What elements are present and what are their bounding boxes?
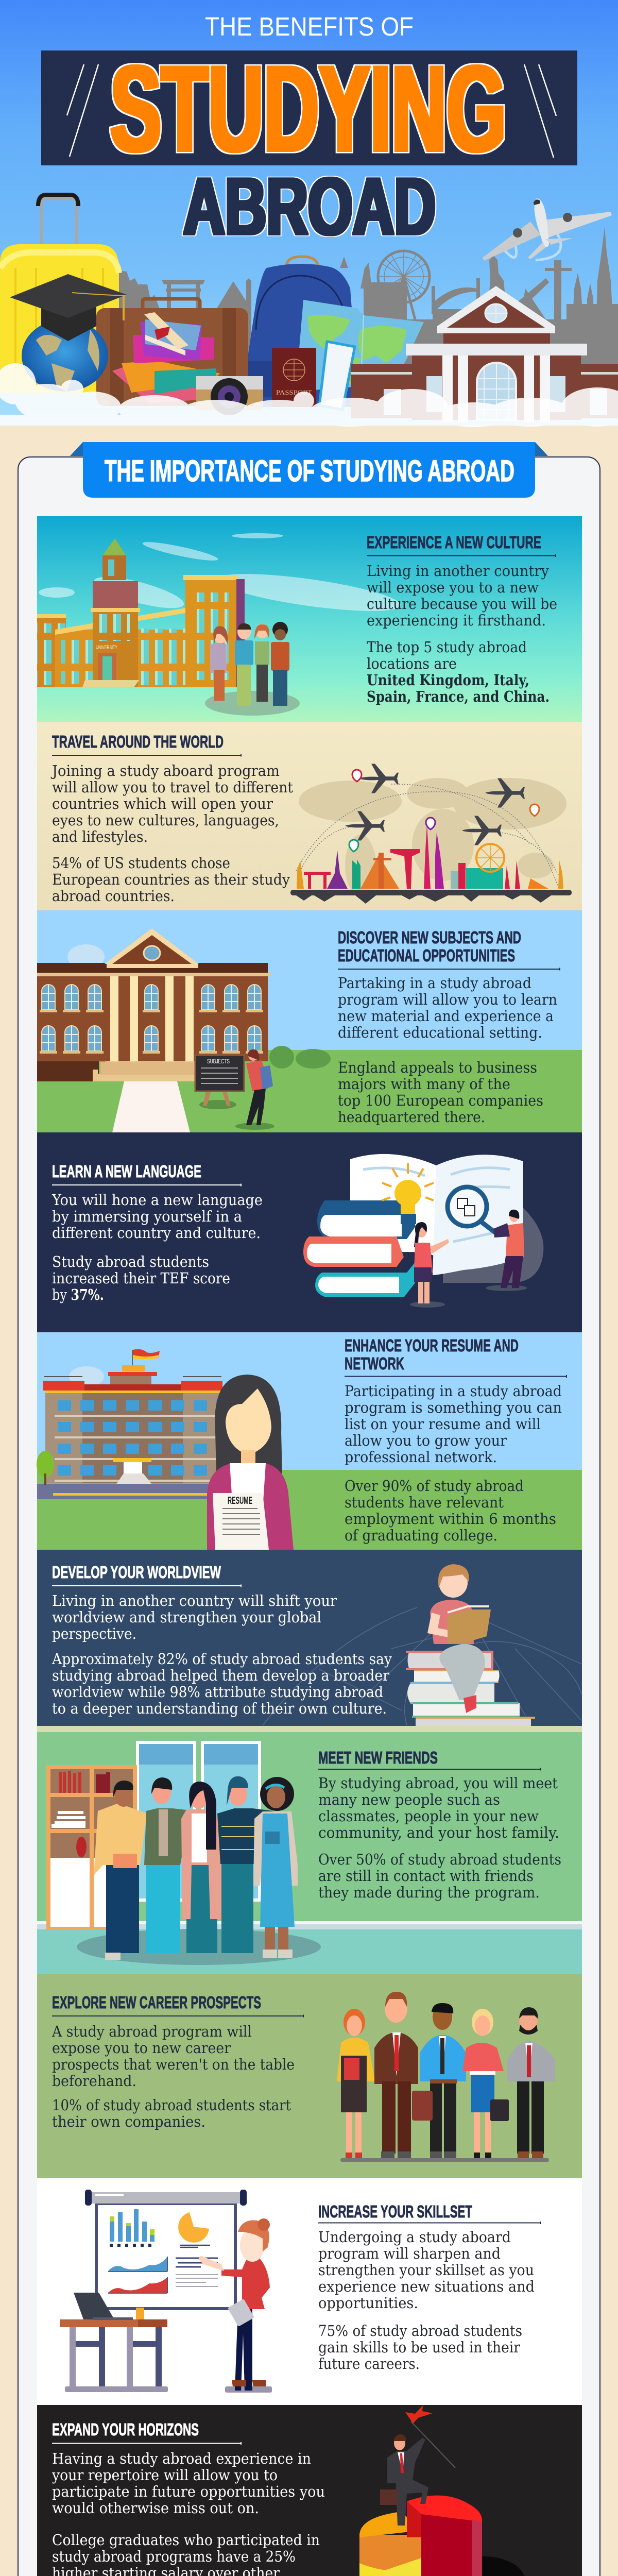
panel: increase your skillset [37,2178,582,2405]
icon: globe with graduation cap [10,274,127,392]
text block: program is something you can [345,1399,562,1416]
icon: backpack [244,257,355,407]
icon: airplane [483,198,612,261]
text block [52,2450,325,2576]
text block: to a deeper understanding of their own culture. [52,1700,387,1717]
text block: top 100 European companies [338,1092,543,1109]
text block: will expose you to a new [367,579,539,596]
text block: countries which will open your [52,795,273,812]
icon: camera [196,376,263,415]
text block: program will allow you to learn [338,991,557,1008]
text block [318,1774,561,1901]
text block: new material and experience a [338,1007,554,1025]
text block [52,2023,295,2130]
text block: gain skills to be used in their [318,2338,520,2356]
text block: and lifestyles. [52,828,148,845]
text block: increased their TEF score [52,1269,230,1287]
panel: discover new subjects [37,910,582,1132]
text block: United Kingdom, Italy, [367,671,529,689]
text block: different educational setting. [338,1024,542,1041]
text block: You will hone a new language [52,1191,263,1209]
illustration: world map landmarks [290,764,572,904]
icon: boarding pass [319,342,355,410]
illustration: globe network and student on books [263,1564,582,1726]
text block: Undergoing a study aboard [318,2228,511,2246]
panel: travel around the world [37,722,582,910]
professional 2 [374,1992,418,2158]
text block: Living in another country will shift your [52,1592,337,1609]
text block: different country and culture. [52,1224,261,1242]
text block: Joining a study aboard program [50,762,280,779]
text block: opportunities. [318,2294,418,2312]
heading: TRAVEL AROUND THE WORLD [52,732,224,751]
heading: EXPERIENCE A NEW CULTURE [367,533,541,552]
text block: Over 90% of study abroad [345,1477,524,1495]
title: the benefits of: THE BENEFITS OF [205,12,414,41]
text block: beforehand. [52,2072,136,2090]
heading: EXPAND YOUR HORIZONS [52,2420,199,2439]
text block: culture because you will be [367,595,557,613]
text block: community, and your host family. [318,1824,559,1841]
heading: DEVELOP YOUR WORLDVIEW [52,1563,221,1582]
text block: Living in another country [367,562,550,580]
heading: ENHANCE YOUR RESUME AND [345,1336,519,1355]
text block: they made during the program. [318,1884,540,1901]
friend 4 [217,1776,273,1953]
text block: worldview while 98% attribute studying abroad [52,1683,383,1701]
panel: meet new friends [37,1726,582,1974]
text block [52,1592,392,1717]
friend 3 [181,1782,222,1953]
friend 1 [94,1781,147,1960]
heading [338,928,521,965]
text block: by 37%. [52,1286,104,1303]
text block: England appeals to business [338,1059,537,1076]
text block [50,762,293,905]
header: sky hero [0,0,618,427]
text block: Having a study abroad experience in [52,2450,311,2467]
text block: Approximately 82% of study abroad students say [52,1650,392,1668]
text block [367,562,557,705]
text block: many new people such as [318,1791,500,1808]
panel: enhance your resume [37,1332,582,1550]
text block: 54% of US students chose [52,854,230,872]
text block [338,974,557,1126]
text block: European countries as their study [52,871,290,888]
text block [345,1382,562,1544]
text block: future careers. [318,2355,420,2372]
illustration: five professionals [337,1992,555,2162]
icon: brown suitcase [96,299,248,406]
text block: expose you to new career [52,2039,231,2057]
section banner [70,442,548,498]
illustration: college building with student: SUBJECTS [207,1058,230,1065]
text block: Partaking in a study abroad [338,974,531,992]
illustration: college building with student [37,928,331,1132]
professional 3 [412,2003,466,2158]
heading: INCREASE YOUR SKILLSET [318,2202,472,2221]
text block: headquartered there. [338,1108,485,1126]
heading: DISCOVER NEW SUBJECTS AND [338,928,521,947]
icon: passport: PASSPORT [276,388,312,396]
icon: yellow suitcase [0,195,119,393]
text block: participate in future opportunities you [52,2483,325,2500]
text block: their own companies. [52,2113,205,2130]
text block: The top 5 study abroad [367,638,527,656]
text block: your repertoire will allow you to [52,2466,278,2484]
text block: list on your resume and will [345,1415,541,1433]
text block: will allow you to travel to different [52,778,293,796]
text block [52,1191,263,1303]
skyline silhouette [119,227,618,371]
text block: eyes to new cultures, languages, [52,811,279,829]
text block: allow you to grow your [345,1432,507,1449]
text block: locations are [367,655,457,672]
text block: study abroad programs have a 25% [52,2548,296,2565]
illustration: building and woman with resume [37,1349,294,1550]
text block: studying abroad helped them develop a broader [52,1667,389,1684]
text block [318,2228,535,2372]
text block: program will sharpen and [318,2245,501,2262]
illustration: university and students: UNIVERSITY [96,645,117,651]
text block: By studying abroad, you will meet [318,1774,558,1792]
clouds [0,363,618,427]
ferris wheel silhouette [378,251,430,319]
text block: prospects that weren't on the table [52,2056,295,2073]
text block: Study abroad students [52,1253,209,1270]
text block: Spain, France, and China. [367,688,550,705]
text block: perspective. [52,1625,136,1642]
friend 5 [253,1777,298,1958]
heading: NETWORK [345,1354,404,1373]
panel: learn a new language [37,1132,582,1332]
professional 5 [507,2007,555,2158]
text block: classmates, people in your new [318,1807,539,1825]
illustration: presenter and chart board [60,2190,272,2393]
heading: LEARN A NEW LANGUAGE [52,1162,201,1181]
icon: university building [351,286,618,422]
text block: strengthen your skillset as you [318,2261,534,2279]
illustration: university and students [37,538,245,687]
icon: stack of books [112,312,220,403]
arch silhouette [364,282,397,319]
panel: experience a new culture [37,516,582,722]
title: abroad: ABROAD [183,161,436,252]
text block: employment within 6 months [345,1510,556,1528]
text block: would otherwise miss out on. [52,2499,259,2517]
friend 2 [144,1777,191,1953]
panel: importance of studying abroad [18,442,600,2576]
text block: 75% of study abroad students [318,2322,522,2340]
text block: College graduates who participated in [52,2531,320,2549]
text block: by immersing yourself in a [52,1208,242,1225]
heading: EXPLORE NEW CAREER PROSPECTS [52,1993,261,2012]
illustration: open book and students [303,1154,543,1308]
text block: professional network. [345,1448,497,1466]
icon: passport [272,348,316,407]
text block: A study abroad program will [52,2023,252,2040]
icon: world map [296,300,424,392]
heading: EDUCATIONAL OPPORTUNITIES [338,946,515,965]
heading [345,1336,519,1373]
text block: abroad countries. [52,887,175,905]
illustration: building and woman with resume: RESUME [228,1495,252,1506]
illustration: group of friends in a room [46,1741,321,1965]
heading: MEET NEW FRIENDS [318,1748,438,1767]
text block: experiencing it firsthand. [367,612,546,629]
professional 4 [462,2009,509,2158]
text block: 10% of study abroad students start [52,2096,291,2114]
text block: students have relevant [345,1494,504,1511]
illustration: man with flag on pie chart [359,2405,525,2576]
text block: majors with many of the [338,1075,510,1093]
panel: develop your worldview [37,1550,582,1726]
illustration: students [205,622,300,716]
text block: Participating in a study abroad [345,1382,562,1400]
text block: of graduating college. [345,1527,497,1544]
text block: Over 50% of study abroad students [318,1851,561,1868]
professional 1 [337,2009,375,2158]
panel: expand your horizons [37,2405,582,2576]
text block: experience new situations and [318,2278,535,2295]
text block: are still in contact with friends [318,1867,534,1885]
panel: explore new career prospects [37,1974,582,2178]
text block: worldview and strengthen your global [52,1608,321,1626]
